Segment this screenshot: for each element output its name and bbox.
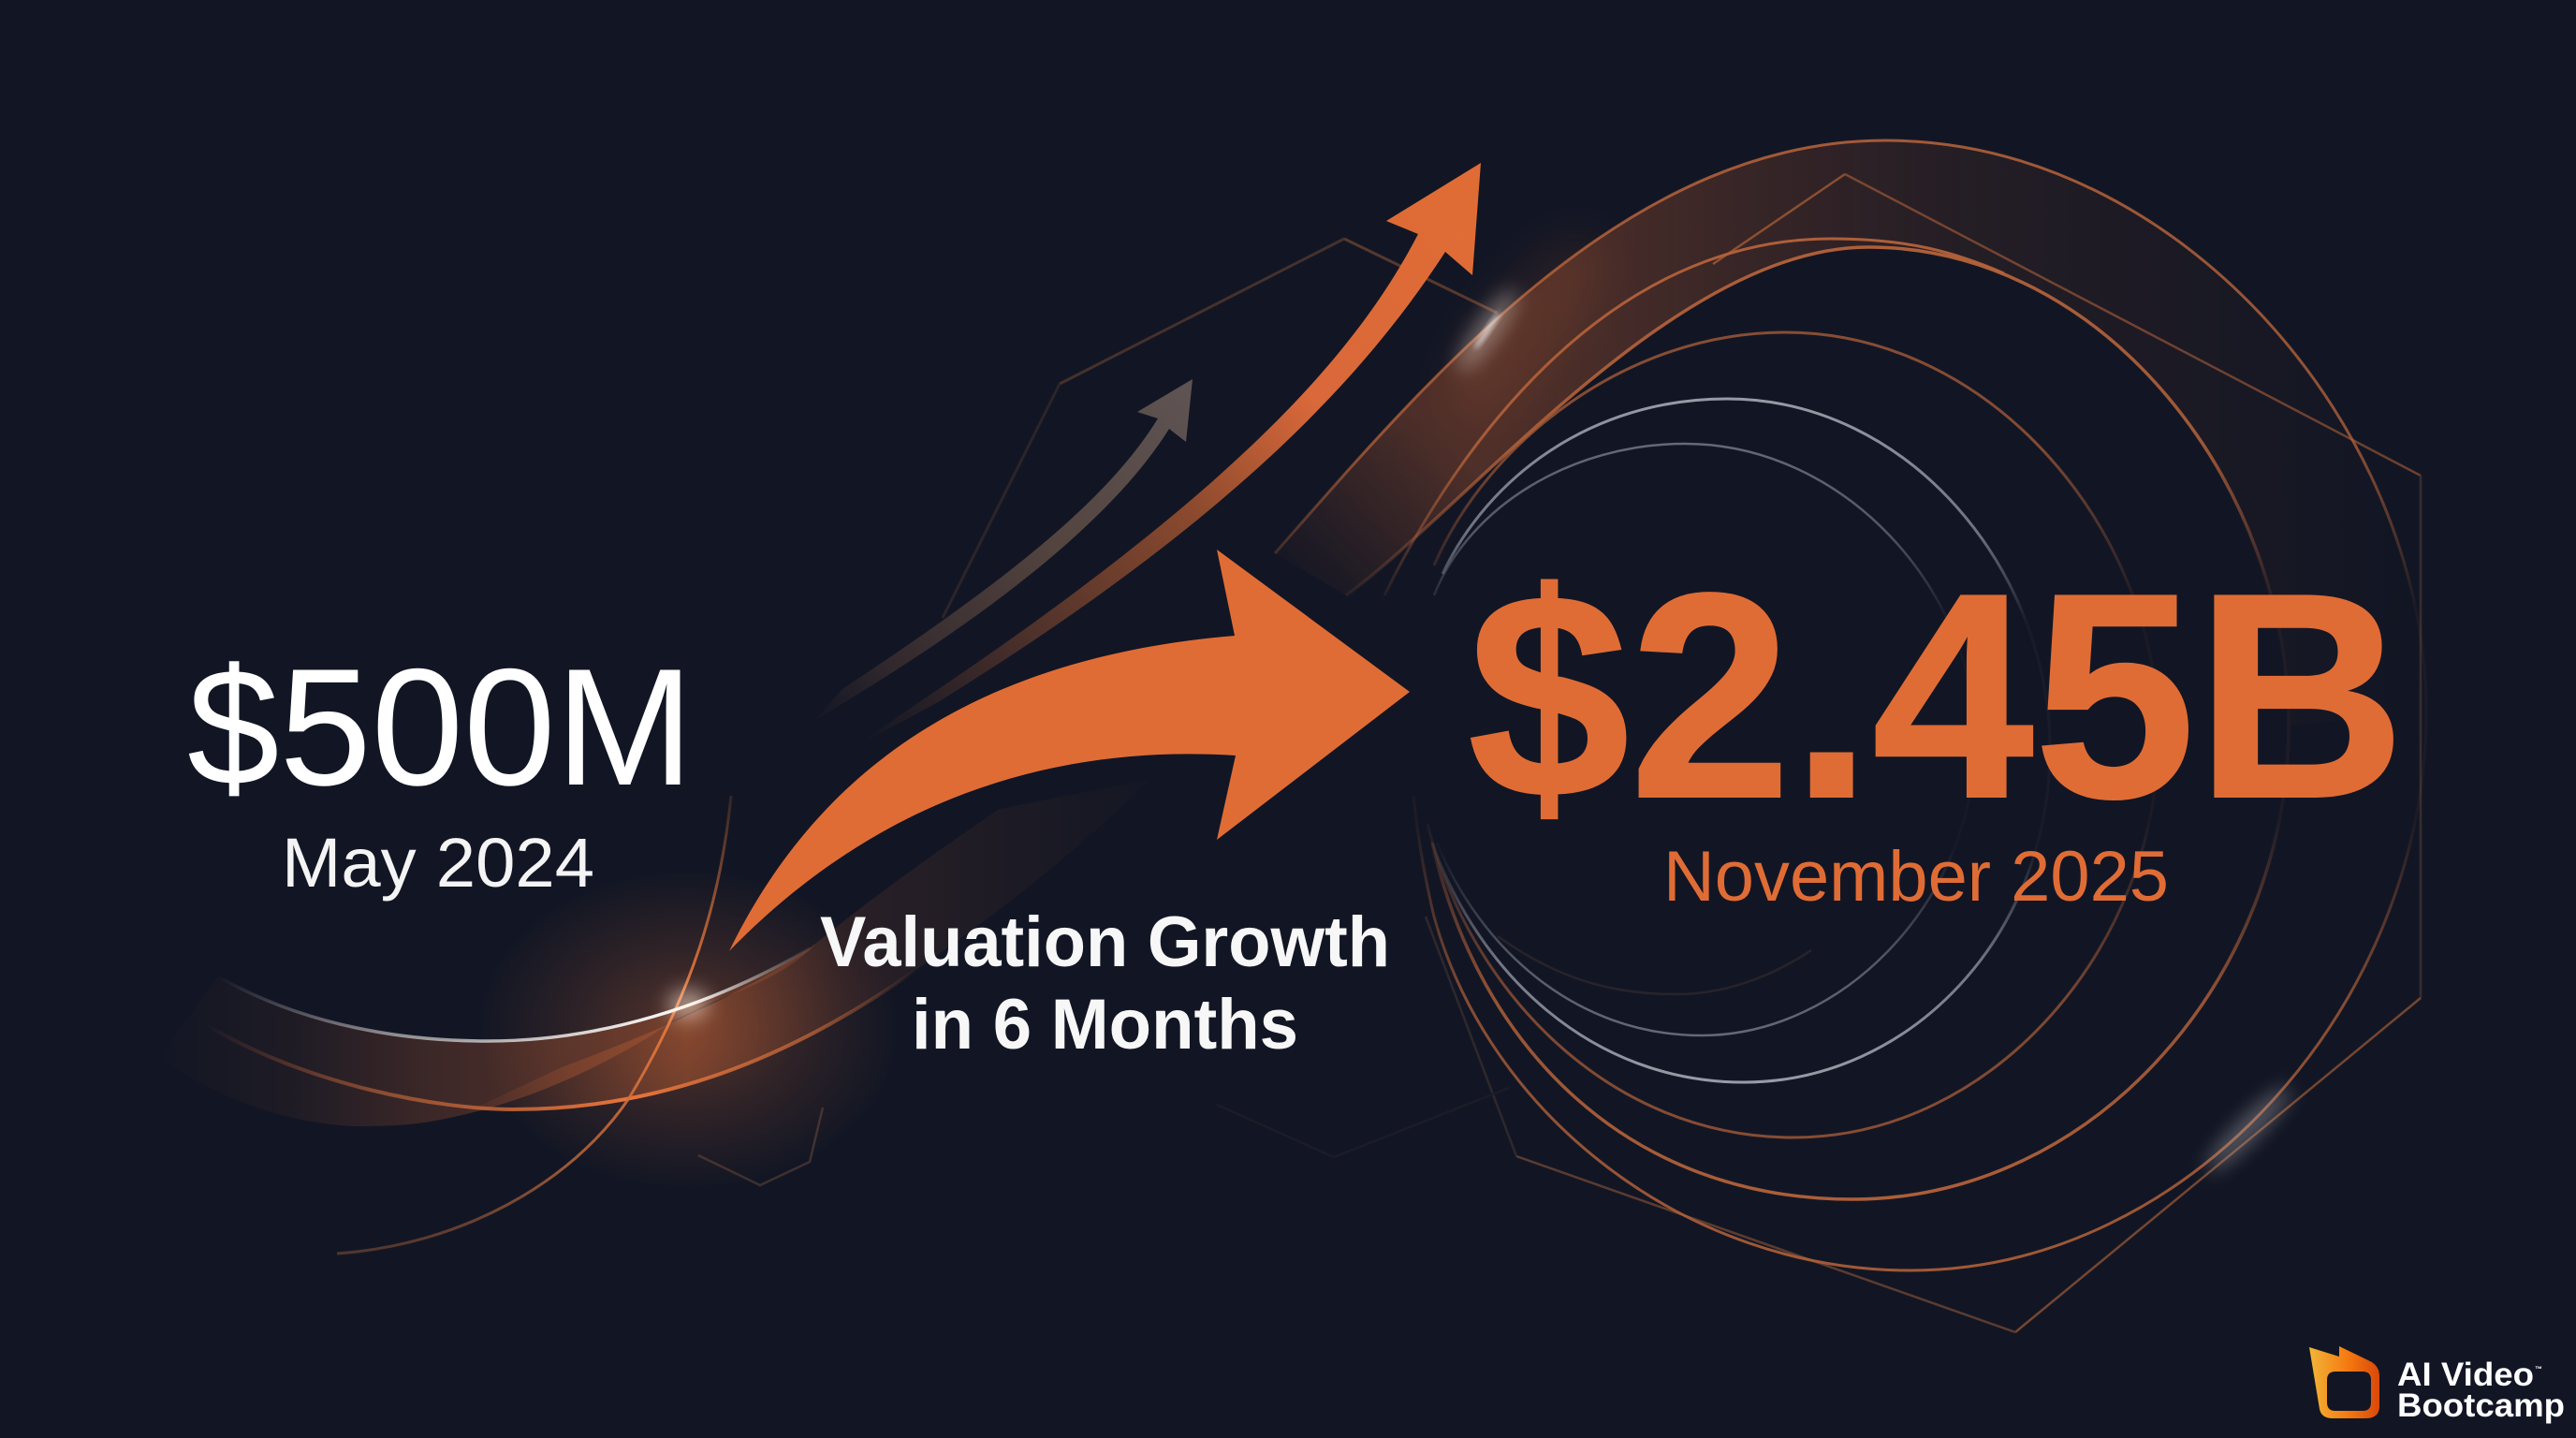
rising orange arrow bbox=[852, 163, 1481, 749]
logo wordmark bbox=[2397, 1357, 2565, 1424]
concentric ring 1: outer bbox=[1275, 140, 2426, 1270]
logo wordmark: Bootcamp bbox=[2397, 1387, 2565, 1424]
stat: $2.45B value: $2.45B bbox=[1468, 534, 2406, 859]
curve: crossing orange arc bbox=[337, 796, 731, 1254]
logo wordmark: ™ bbox=[2535, 1365, 2542, 1373]
concentric ring 5: grey bbox=[1432, 399, 2050, 1082]
glowing swoosh band: upper right bbox=[1286, 142, 2203, 595]
main arrow bbox=[729, 550, 1410, 951]
glowing swoosh band: lower left bbox=[159, 780, 1149, 1189]
concentric ring 3 bbox=[1384, 239, 2004, 595]
decorative hexagon: faint lower fragments bbox=[698, 1088, 1509, 1185]
concentric ring 2 bbox=[1346, 247, 2289, 1199]
logo icon bbox=[2309, 1346, 2379, 1418]
label: valuation growth bbox=[820, 902, 1390, 1064]
concentric ring 4 bbox=[1427, 332, 2159, 1137]
light glint: left crossing bbox=[667, 990, 709, 1020]
light glint: lower right ring bbox=[2200, 1080, 2297, 1178]
stat: May 2024 date: May 2024 bbox=[282, 824, 594, 902]
small grey rising arrow bbox=[814, 379, 1193, 721]
light glint: upper ring bbox=[1450, 284, 1525, 377]
concentric ring 6: grey bbox=[1434, 444, 1975, 1035]
concentric ring 7: faint inner bbox=[1498, 936, 1811, 994]
decorative hexagon: large right outline bbox=[1426, 174, 2421, 1332]
stat: $500M value: $500M bbox=[187, 634, 694, 820]
label: valuation growth: Valuation Growth bbox=[820, 902, 1390, 982]
curve: orange arc left bbox=[205, 969, 917, 1109]
logo: AI Video Bootcamp bbox=[2309, 1346, 2565, 1424]
logo wordmark: AI Video bbox=[2397, 1357, 2534, 1393]
stat: November 2025 date: November 2025 bbox=[1663, 837, 2169, 917]
curve: white arc left bbox=[218, 948, 810, 1041]
decorative hexagon: upper left faint outline bbox=[943, 239, 1497, 618]
label: valuation growth: in 6 Months bbox=[912, 985, 1298, 1064]
